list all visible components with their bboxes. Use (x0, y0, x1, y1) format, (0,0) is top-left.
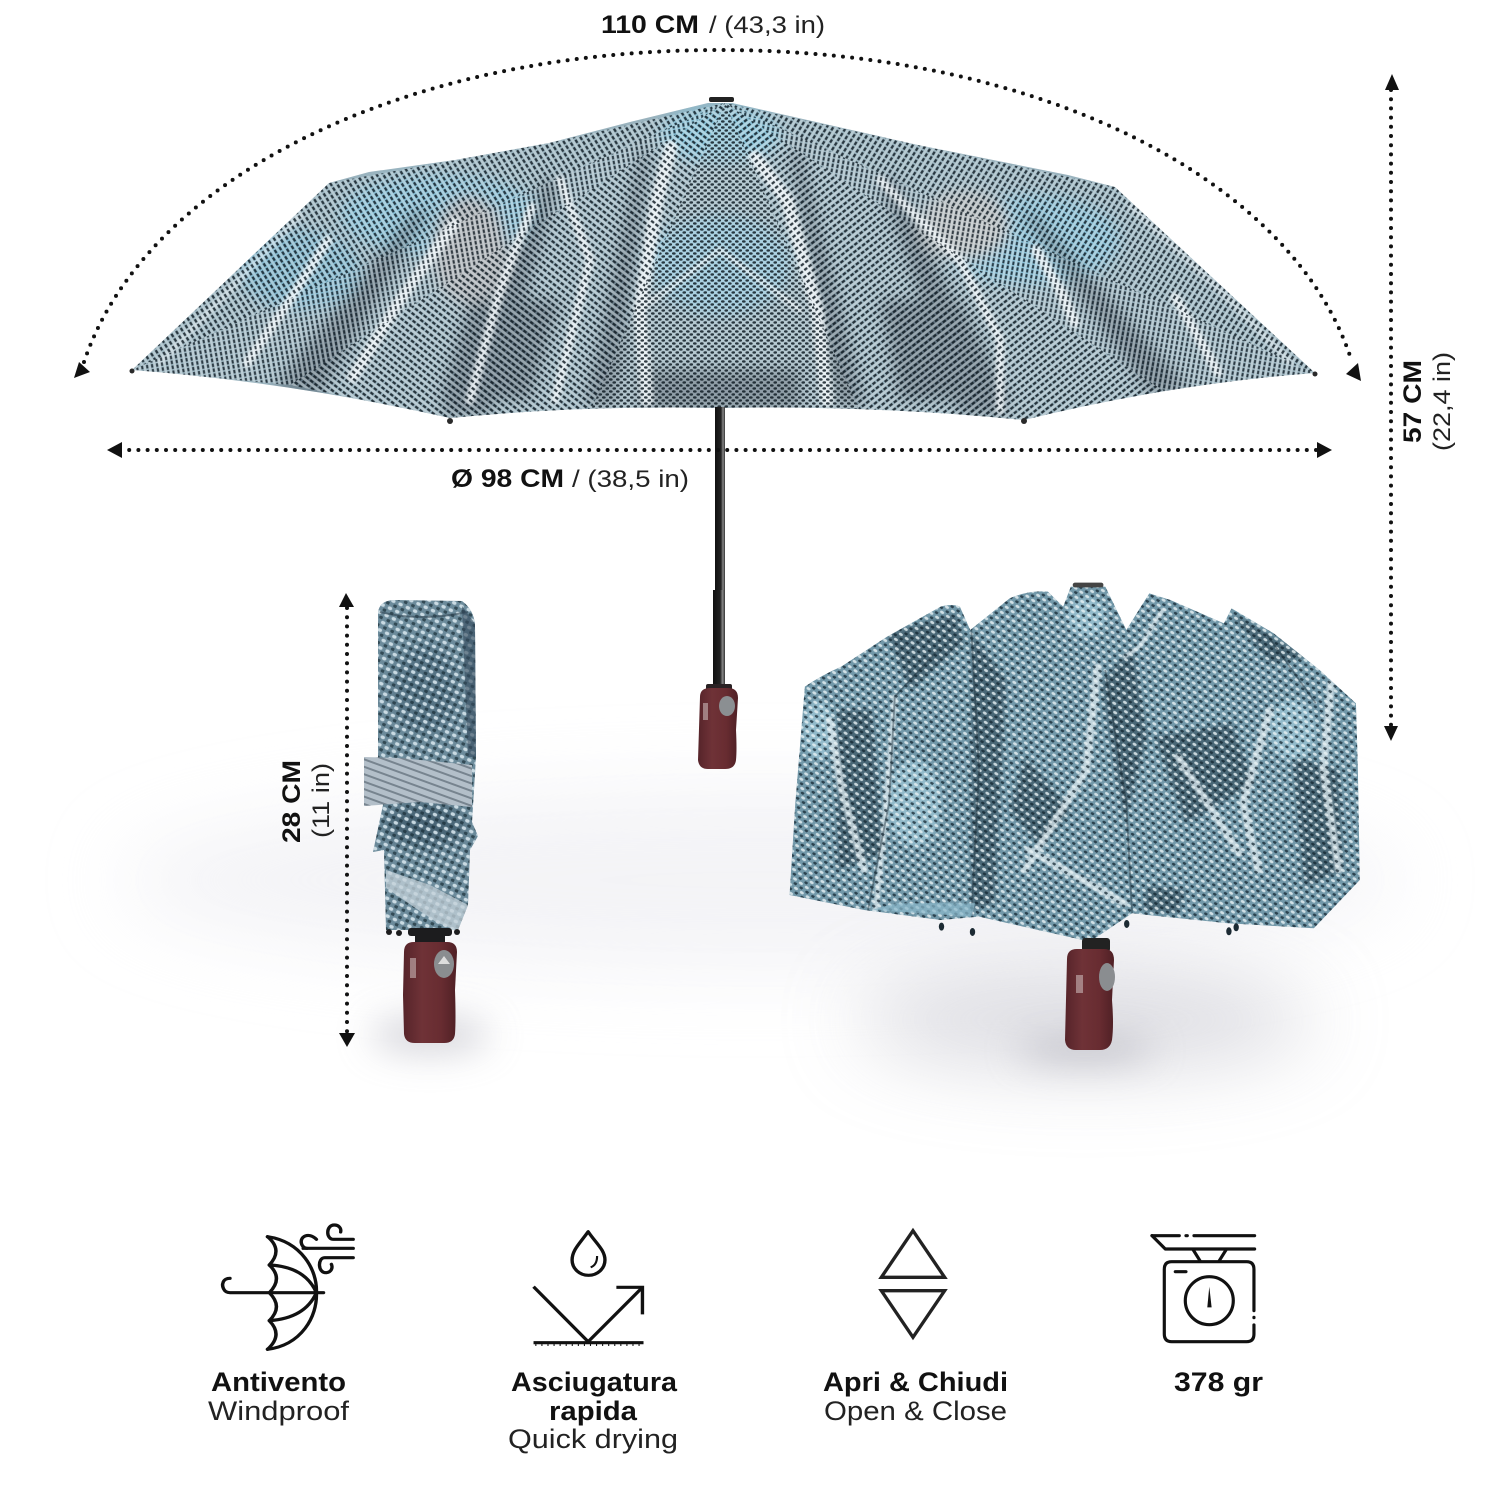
text: Antivento: Antivento (211, 1367, 346, 1397)
label: 98 cm (451, 465, 689, 493)
label: 28 cm: 28 CM (278, 760, 306, 843)
feature: windproof (208, 1225, 353, 1426)
feature: weight (1152, 1236, 1264, 1397)
icon: triangles (881, 1231, 945, 1337)
handle (698, 684, 738, 769)
feature: open and close (823, 1231, 1008, 1426)
inverted handle (1065, 949, 1115, 1050)
rolled handle (403, 942, 457, 1043)
shaft (713, 407, 725, 690)
strap (364, 757, 472, 807)
canopy (120, 95, 1330, 430)
collar (386, 928, 460, 944)
icon: water drop and bounce (534, 1232, 644, 1345)
text: Antivento: Windproof (208, 1396, 350, 1426)
feature: quick drying (508, 1232, 678, 1454)
label: 57 cm: 57 CM (1399, 360, 1427, 443)
text: Asciugatura: Asciugatura (511, 1367, 678, 1397)
dimension: height line (1384, 74, 1399, 741)
label: 110 cm (601, 11, 825, 39)
text: 378 gr: 378 gr (1174, 1367, 1264, 1397)
open umbrella (120, 95, 1330, 769)
dimension: diameter line (107, 442, 1332, 458)
inverted umbrella (780, 580, 1369, 947)
text: Asciugatura: rapida (549, 1396, 638, 1426)
soft floor shadows (120, 790, 1400, 1070)
rolled umbrella (364, 595, 485, 1043)
dimension: rolled length line (339, 593, 355, 1047)
cap (1073, 583, 1103, 587)
dimension: circumference arc (74, 50, 1361, 381)
inverted rib tips (939, 920, 1239, 936)
label: 28 cm: (11 in) (308, 763, 335, 838)
label: 110 cm: / (43,3 in) (709, 12, 825, 39)
rolled fabric (373, 600, 478, 930)
label: 110 cm: 110 CM (601, 11, 699, 39)
icon: windy umbrella (223, 1225, 353, 1349)
text: Apri & Chiudi (823, 1367, 1008, 1426)
text: Antivento (208, 1367, 350, 1426)
label: 98 cm: / (38,5 in) (572, 466, 689, 493)
text: Apri & Chiudi: Open & Close (824, 1396, 1007, 1426)
top ferrule (709, 97, 734, 102)
text: Apri & Chiudi: Apri & Chiudi (823, 1367, 1008, 1397)
label: 57 cm: (22,4 in) (1429, 352, 1456, 451)
icon: scale (1152, 1236, 1255, 1342)
text: Asciugatura: Quick drying (508, 1424, 678, 1454)
text: Asciugatura (508, 1367, 678, 1454)
label: 57 cm (1399, 352, 1456, 451)
label: 98 cm: Ø 98 CM (451, 465, 564, 493)
label: 28 cm (278, 760, 335, 843)
inverted collar (1082, 938, 1110, 952)
inverted canopy (780, 580, 1369, 947)
rib tips (130, 368, 1318, 424)
